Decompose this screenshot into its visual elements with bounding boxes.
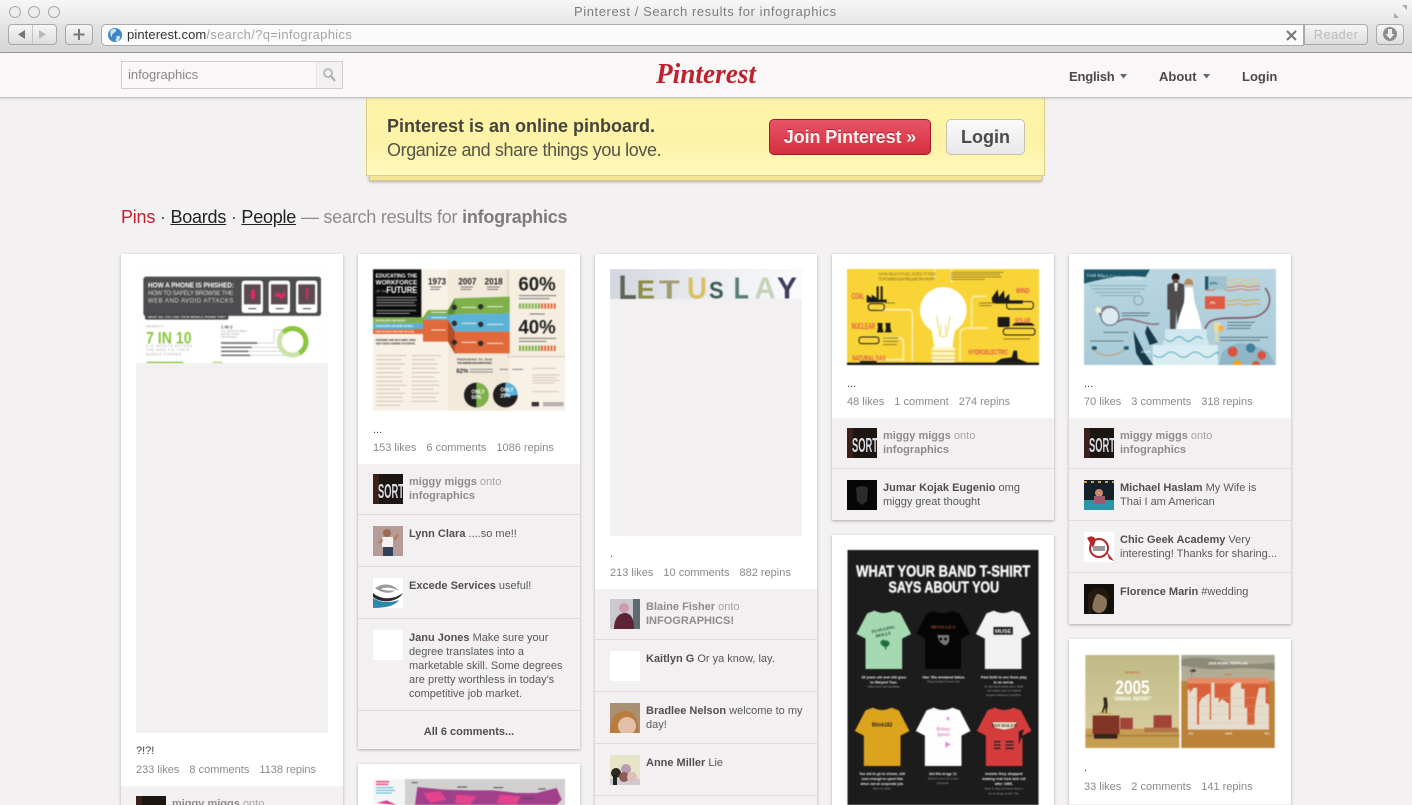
avatar: Blaine Fisher — [610, 599, 640, 629]
pin stats: 48 likes 1 comment 274 repins — [847, 396, 1010, 408]
thumbnail: educating the workforce of the future: ONLY — [500, 388, 514, 394]
comment: Janu Jones — [358, 618, 580, 710]
thumbnail: how much fuel to power a lightbulb: NATURAL GAS — [852, 353, 886, 362]
thumbnail: what your band t-shirt says about you: Insists they stopped — [985, 772, 1022, 776]
site header bar — [0, 53, 1412, 98]
thumbnail: what your band t-shirt says about you: when not at corporate job. — [860, 782, 904, 786]
avatar: Kaitlyn G — [610, 651, 640, 681]
pinner text: INFOGRAPHICS! — [646, 615, 734, 627]
thumbnail: how a phone is phished: THE WEB VIA THEIR — [146, 348, 190, 352]
thumbnail: what your band t-shirt says about you: people whenever possible. — [986, 693, 1022, 697]
thumbnail: educating the workforce of the future: ASSOCIATE'S OR SOME SCHOOL — [376, 325, 414, 328]
thumbnail: 2005 annual report: JAN — [1188, 733, 1193, 736]
avatar: Jumar Kojak Eugenio — [847, 480, 877, 510]
thumbnail: what your band t-shirt says about you: Hugs Kenny Powers fan. — [927, 680, 961, 684]
thumbnail: let us lay — [610, 269, 802, 536]
thumbnail: what your band t-shirt says about you: 35 years old and still goes — [861, 675, 906, 679]
thumbnail: what your band t-shirt says about you: cool enough to sport this — [861, 777, 903, 781]
comment text: Janu Jones Make sure your — [409, 632, 548, 644]
thumbnail: what your band t-shirt says about you: in an arena. — [994, 680, 1014, 684]
thumbnail: what your band t-shirt says about you: VAN HALEN — [992, 723, 1018, 728]
pin card: annual report — [1069, 639, 1291, 805]
banner stacked paper edge — [369, 103, 1042, 181]
thumbnail: wedding cake infographic: 13% — [1209, 280, 1218, 285]
all comments link — [358, 710, 580, 749]
pin activity section — [358, 464, 580, 749]
avatar: miggy miggs — [373, 474, 403, 504]
thumbnail: educating the workforce of the future: 62% — [456, 369, 469, 375]
thumbnail: educating the workforce of the future — [372, 268, 566, 411]
thumbnail: how a phone is phished: U.S. ADULTS CHECK — [221, 329, 247, 333]
thumbnail: 2005 annual report — [1084, 655, 1276, 748]
pin card: map infographic — [358, 764, 580, 805]
avatar: Bradlee Nelson — [610, 703, 640, 733]
comment text: Excede Services useful! — [409, 580, 531, 592]
thumbnail: wedding cake infographic: Look Who's Coming to Dinner — [1086, 273, 1143, 282]
pinned-by row — [847, 428, 975, 458]
pinner text: infographics — [1120, 444, 1186, 456]
pin card: wedding — [1069, 254, 1291, 624]
avatar: miggy miggs — [847, 428, 877, 458]
thumbnail: what your band t-shirt says about you: purposes. — [937, 781, 950, 785]
new tab button — [65, 24, 93, 45]
thumbnail: what your band t-shirt says about you: MUSE — [995, 629, 1012, 635]
pin activity section — [595, 589, 817, 805]
thumbnail: what your band t-shirt says about you: Has '90s armband tattoo. — [922, 675, 965, 679]
comment text: Lynn Clara ....so me!! — [409, 528, 517, 540]
pin stats: 153 likes 6 comments 1086 repins — [373, 442, 554, 454]
pinned-by row — [136, 796, 264, 805]
pin stats: 233 likes 8 comments 1138 repins — [136, 764, 316, 776]
pin stats: 70 likes 3 comments 318 repins — [1084, 396, 1253, 408]
language caret — [1120, 74, 1127, 78]
join button — [769, 119, 931, 155]
reader button — [1304, 24, 1368, 45]
thumbnail: 2005 annual report: PLAN — [1225, 673, 1231, 676]
thumbnail: what your band t-shirt says about you: Britney — [937, 728, 951, 733]
search query: infographics — [128, 67, 198, 82]
comment: Florence Marin — [1069, 572, 1291, 624]
thumbnail: what your band t-shirt says about you: to Warped Tour. — [870, 680, 898, 684]
back and forward buttons — [8, 24, 57, 45]
avatar: Florence Marin — [1084, 584, 1114, 614]
pin card: band t-shirt — [832, 535, 1054, 805]
thumbnail: how much fuel to power a lightbulb: HOW MUCH FUEL DOES IT TAKE — [878, 272, 937, 277]
thumbnail: 2005 annual report: DEC — [1265, 734, 1270, 736]
thumbnail: what your band t-shirt says about you: Spears — [937, 733, 950, 738]
pin caption: . — [1084, 762, 1087, 774]
login button: Login — [961, 127, 1010, 147]
thumbnail: educating the workforce of the future: WORKFORCE — [376, 280, 418, 287]
pin activity section — [121, 786, 343, 805]
thumbnail: educating the workforce of the future: 2007 — [458, 277, 476, 287]
thumbnail: what your band t-shirt says about you: May or may not have done a — [985, 787, 1023, 791]
thumbnail: wedding cake infographic: 2% — [1210, 301, 1216, 305]
comment text: Chic Geek Academy Very — [1120, 534, 1250, 546]
thumbnail: educating the workforce of the future: ONLY — [471, 389, 485, 395]
avatar: miggy miggs — [136, 796, 166, 805]
comment text: Bradlee Nelson welcome to my — [646, 705, 803, 717]
pin card: let us lay — [595, 254, 817, 805]
pin stats: 213 likes 10 comments 882 repins — [610, 567, 791, 579]
thumbnail: educating the workforce of the future: PREPARING TO JOIN — [457, 358, 492, 362]
thumbnail: what your band t-shirt says about you: Got this at age 12. — [929, 772, 957, 776]
thumbnail: how much fuel to power a lightbulb — [846, 268, 1040, 366]
login link: Login — [1242, 69, 1277, 84]
thumbnail: how a phone is phished: SOCIAL SITES — [221, 332, 239, 336]
yellow welcome banner — [366, 98, 1045, 184]
clear icon — [1286, 30, 1297, 41]
pinner text: miggy miggs onto — [1120, 430, 1212, 442]
thumbnail: educating the workforce of the future: 29% — [500, 393, 511, 399]
comment text: are pretty worthless in today's — [409, 674, 554, 686]
search tabs heading: Pins · Boards · People — search results for infographics — [121, 207, 567, 227]
comment: Bradlee Nelson — [595, 691, 817, 743]
thumbnail: what your band t-shirt says about you: Wears it now for ironic — [928, 777, 959, 781]
pinned-by row — [1069, 418, 1291, 468]
thumbnail: what your band t-shirt says about you: FLOGGING — [871, 624, 896, 634]
pin caption: ... — [1084, 378, 1093, 390]
comment: Excede Services — [358, 566, 580, 618]
pinner text: infographics — [409, 490, 475, 502]
avatar: miggy miggs — [1084, 428, 1114, 458]
comment text: marketable skill. Some degrees — [409, 660, 562, 672]
avatar: Janu Jones — [373, 630, 403, 660]
pinner text: infographics — [883, 444, 949, 456]
login button — [946, 119, 1025, 155]
comment text — [1120, 533, 1287, 561]
thumbnail: educating the workforce of the future: THE AMERICAN WORKFORCE — [457, 361, 492, 365]
thumbnail: how a phone is phished: WEB AND AVOID ATTACKS — [148, 298, 233, 304]
thumbnail: 2005 annual report: 2005 WORK PERPLAN — [1208, 662, 1248, 666]
pin caption: ... — [373, 424, 382, 436]
thumbnail: how a phone is phished: 7 IN 10 — [146, 328, 192, 347]
thumbnail: how a phone is phished: 1 IN 2 — [221, 324, 233, 329]
comment: Jumar Kojak Eugenio — [832, 468, 1054, 520]
thumbnail: educating the workforce of the future: AND THEIR EARNING POTENTIAL — [376, 341, 416, 345]
search button icon — [316, 62, 336, 88]
window traffic lights — [9, 6, 60, 18]
comment text: Florence Marin #wedding — [1120, 586, 1248, 598]
thumbnail: what your band t-shirt says about you: Likes beer and moshing. — [867, 685, 900, 689]
thumbnail: 2005 annual report: WORK — [1225, 734, 1233, 736]
thumbnail: how a phone is phished — [136, 269, 328, 733]
thumbnail: what your band t-shirt says about you: Paid $100 to see them play — [981, 675, 1028, 679]
about menu: About — [1159, 69, 1197, 84]
thumbnail: what your band t-shirt says about you: SAYS ABOUT YOU — [888, 579, 999, 596]
pin card: phone phishing — [121, 254, 343, 805]
pin activity section — [832, 418, 1054, 520]
thumbnail: educating the workforce of the future: 1973 — [428, 277, 446, 287]
thumbnail: what your band t-shirt says about you: METALLICA — [931, 624, 955, 629]
thumbnail: what your band t-shirt says about you: MOLLY — [875, 630, 892, 639]
thumbnail: what your band t-shirt says about you: and makes sure to remind — [987, 689, 1021, 693]
thumbnail: educating the workforce of the future: 2018 — [485, 277, 503, 287]
pin card: lightbulb fuel — [832, 254, 1054, 520]
thumbnail: how a phone is phished: U.S. ADULTS ACCESS — [146, 344, 193, 348]
thumbnail: how a phone is phished: WHAT DO YOU USE YOUR MOBILE PHONE FOR? — [148, 315, 226, 319]
thumbnail: how a phone is phished: NEARLY — [146, 325, 164, 329]
pinner text — [646, 601, 740, 627]
fullscreen icon — [1394, 5, 1407, 18]
comment text: competitive job market. — [409, 688, 522, 700]
comment text: interesting! Thanks for sharing... — [1120, 548, 1277, 560]
thumbnail: what your band t-shirt says about you — [847, 550, 1039, 805]
thumbnail: educating the workforce of the future: GROWING AND DECLINING JOBS — [376, 338, 416, 342]
avatar: Chic Geek Academy — [1084, 532, 1114, 562]
pin caption: ... — [847, 378, 856, 390]
thumbnail: what your band t-shirt says about you: Has two kids. — [873, 787, 891, 791]
thumbnail: educating the workforce of the future: 50% — [471, 395, 482, 401]
thumbnail: 2005 annual report: "ANNUAL REPORT" — [1113, 696, 1152, 702]
comment text: Kaitlyn G Or ya know, lay. — [646, 653, 775, 665]
comment: Lynn Clara — [358, 514, 580, 566]
comment text: Thai I am American — [1120, 496, 1215, 508]
thumbnail: how a phone is phished: HOW TO SAFELY BROWSE THE — [148, 291, 233, 297]
comment: Michael Haslam — [1069, 468, 1291, 520]
comment: Chic Geek Academy — [1069, 520, 1291, 572]
about caret — [1203, 74, 1210, 78]
thumbnail: what your band t-shirt says about you: Too old to go to shows, still — [859, 772, 905, 776]
thumbnail: what your band t-shirt says about you: after 1985. — [995, 782, 1013, 786]
comment text: Michael Haslam My Wife is — [1120, 482, 1256, 494]
next comment row — [595, 795, 817, 805]
search box — [121, 61, 343, 89]
thumbnail: educating the workforce of the future: 60% — [518, 275, 556, 296]
comment: Kaitlyn G — [595, 639, 817, 691]
all comments link: All 6 comments... — [424, 726, 514, 738]
pinner text: Blaine Fisher onto — [646, 601, 740, 613]
Pinterest logo: Pinterest — [655, 58, 757, 90]
comment text — [646, 705, 803, 731]
thumbnail: how much fuel to power a lightbulb: WIND — [1016, 286, 1030, 295]
pinner text — [409, 476, 501, 502]
pinner text — [1120, 429, 1287, 457]
window title: Pinterest / Search results for infographics — [574, 4, 837, 19]
thumbnail: educating the workforce of the future: 40% — [518, 317, 556, 338]
thumbnail: how much fuel to power a lightbulb: NUCLEAR — [852, 321, 875, 331]
thumbnail: educating the workforce of the future: BACHELOR'S AND ABOVE — [376, 319, 406, 322]
thumbnail: how much fuel to power a lightbulb: COAL — [852, 291, 864, 301]
thumbnail: how a phone is phished: HOW A PHONE IS PHISHED: — [148, 283, 234, 290]
avatar: Lynn Clara — [373, 526, 403, 556]
language menu: English — [1069, 69, 1115, 84]
thumbnail: educating the workforce of the future: OF THE — [376, 289, 389, 293]
thumbnail: how much fuel to power a lightbulb: HYDROELECTRIC — [969, 348, 1008, 357]
banner headline: Pinterest is an online pinboard. — [387, 116, 655, 136]
pin activity section — [1069, 804, 1291, 805]
thumbnail: 2005 annual report: FICTION CO — [1125, 670, 1140, 674]
banner face — [366, 97, 1045, 176]
comment text: day! — [646, 719, 667, 731]
comment text: Anne Miller Lie — [646, 757, 723, 769]
URL text: pinterest.com/search/?q=infographics — [127, 27, 352, 42]
join button: Join Pinterest » — [784, 127, 916, 147]
thumbnail: wedding cake infographic — [1084, 269, 1276, 365]
avatar: Excede Services — [373, 578, 403, 608]
pin card: educating the workforce — [358, 254, 580, 749]
thumbnail: educating the workforce of the future: HIGH SCHOOL DIPLOMA OR LESS — [376, 331, 415, 334]
thumbnail: pink and purple US map — [374, 778, 566, 805]
pinner text: miggy miggs onto — [883, 430, 975, 442]
thumbnail: wedding cake infographic: 24.8% — [1141, 350, 1152, 354]
thumbnail: how a phone is phished: MOBILE PHONES. — [146, 352, 183, 356]
comment text — [883, 481, 1050, 509]
thumbnail: 2005 annual report: 2005 — [1115, 677, 1150, 699]
comment: Anne Miller — [595, 743, 817, 795]
comment text: degree translates into a — [409, 646, 524, 658]
comment text: Jumar Kojak Eugenio omg — [883, 482, 1020, 494]
thumbnail: how a phone is phished: ON PHONES — [221, 335, 237, 339]
thumbnail: what your band t-shirt says about you: Or has liked them since 2000 — [984, 685, 1024, 689]
avatar: Michael Haslam — [1084, 480, 1114, 510]
avatar: Anne Miller — [610, 755, 640, 785]
thumbnail: educating the workforce of the future: FUTURE — [386, 285, 417, 295]
thumbnail: educating the workforce of the future: EDUCATING THE — [376, 273, 418, 279]
address bar — [101, 24, 1304, 46]
pin caption: ?!?! — [136, 745, 154, 757]
comment text: miggy great thought — [883, 496, 980, 508]
pinner text: miggy miggs onto — [409, 476, 501, 488]
comment text — [1120, 481, 1287, 509]
banner subline: Organize and share things you love. — [387, 140, 661, 160]
thumbnail: what your band t-shirt says about you: making real rock and roll — [982, 777, 1025, 781]
reader button: Reader — [1314, 27, 1358, 42]
downloads button — [1376, 24, 1404, 45]
thumbnail: what your band t-shirt says about you: Blink182 — [872, 722, 893, 728]
thumbnail: how much fuel to power a lightbulb: TO POWER A LIGHTBULB FOR A YEAR? — [878, 277, 936, 282]
pinner text — [883, 430, 975, 456]
pin stats: 33 likes 2 comments 141 repins — [1084, 781, 1253, 793]
browser window chrome — [0, 0, 1412, 53]
globe icon — [108, 28, 122, 42]
pinned-by row — [610, 599, 740, 629]
pinned-by row — [373, 474, 501, 504]
pin activity section — [1069, 418, 1291, 624]
comment text — [409, 632, 562, 700]
pin caption: . — [610, 548, 613, 560]
thumbnail: what your band t-shirt says about you: lot of drugs in the '70s. — [989, 791, 1019, 795]
